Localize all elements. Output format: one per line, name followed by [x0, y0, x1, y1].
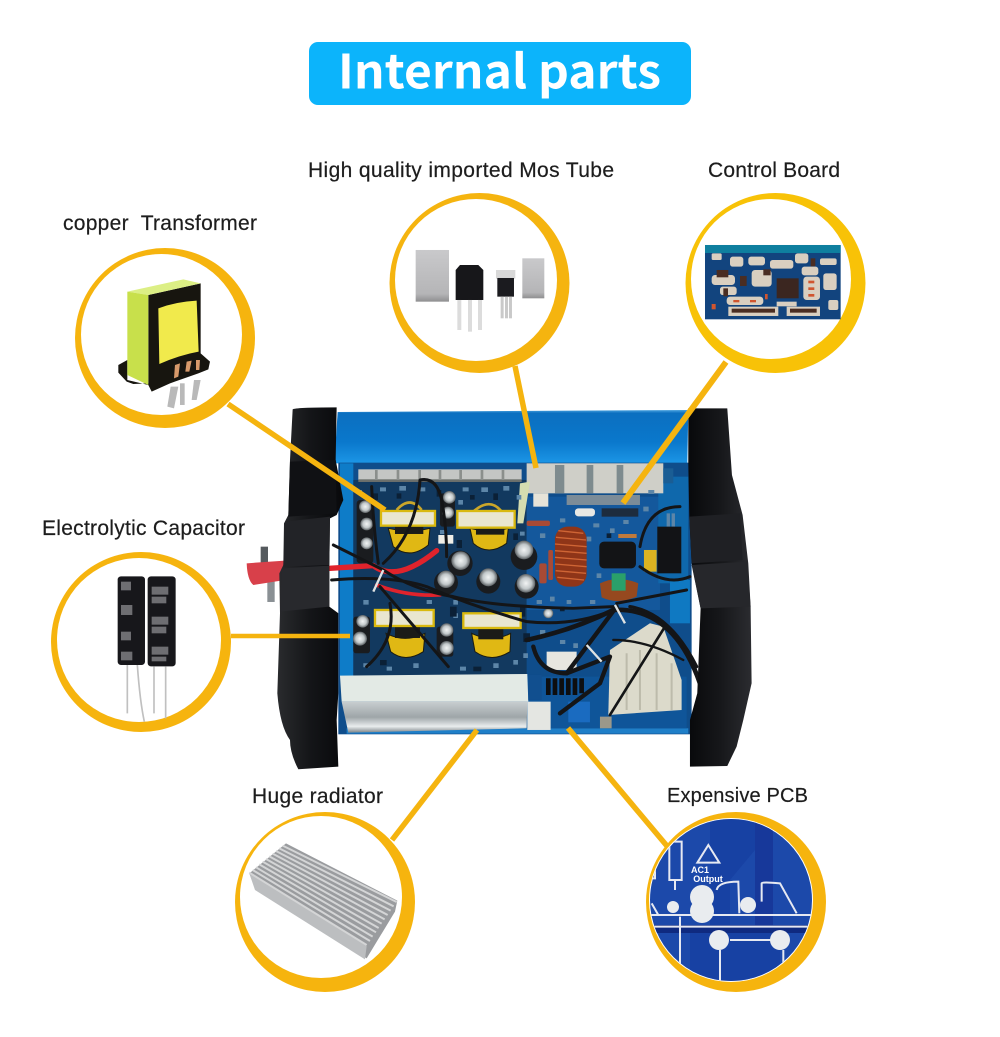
- icon: PCB close-up: [650, 819, 812, 981]
- circle: Mos tube: [390, 193, 570, 373]
- circle: copper transformer: [75, 248, 255, 428]
- aluminium radiator: [340, 674, 551, 733]
- small board components: [357, 486, 675, 671]
- copper toroid coil: [555, 527, 587, 587]
- icon: two capacitors: [118, 576, 176, 722]
- circle: huge radiator: [235, 812, 415, 992]
- small transistor fins: [547, 652, 590, 722]
- icon: control board module: [705, 245, 841, 319]
- label: copper transformer: copper Transformer: [63, 212, 257, 235]
- icon: PCB close-up: AC1: [691, 865, 709, 875]
- black and red cables: [330, 480, 700, 715]
- icon: Mos tubes: [416, 250, 544, 332]
- circle: control board: [686, 193, 866, 373]
- leader lines connecting circles to the inverter: [228, 362, 726, 846]
- blue aluminium top cover: [334, 410, 688, 463]
- left black bracket: [277, 407, 343, 769]
- red resistors: [527, 521, 553, 583]
- icon: PCB close-up: Output: [693, 874, 723, 884]
- red battery terminal: [247, 547, 285, 602]
- label: high quality imported Mos tube: High quality imported Mos Tube: [308, 159, 614, 182]
- circle: expensive PCB: [640, 810, 826, 992]
- title badge: Internal parts: [338, 34, 661, 102]
- right black bracket: [688, 408, 752, 767]
- white capacitor pack: [600, 623, 682, 728]
- filter inductors: [599, 527, 681, 601]
- transformers: [375, 502, 521, 657]
- MOS tube heat-sink strip: [358, 463, 673, 523]
- icon: aluminium heat sink: [249, 843, 397, 959]
- label: expensive PCB: Expensive PCB: [667, 785, 808, 807]
- inverter open-case photo: [247, 407, 752, 769]
- circuit board base: [338, 463, 692, 734]
- label: control board: Control Board: [708, 159, 840, 182]
- label: electrolytic capacitor: Electrolytic Capacitor: [42, 517, 245, 540]
- label: huge radiator: Huge radiator: [252, 785, 383, 808]
- icon: transformer: [118, 279, 210, 408]
- circle: electrolytic capacitor: [51, 552, 231, 732]
- electrolytic capacitors on board: [353, 491, 553, 657]
